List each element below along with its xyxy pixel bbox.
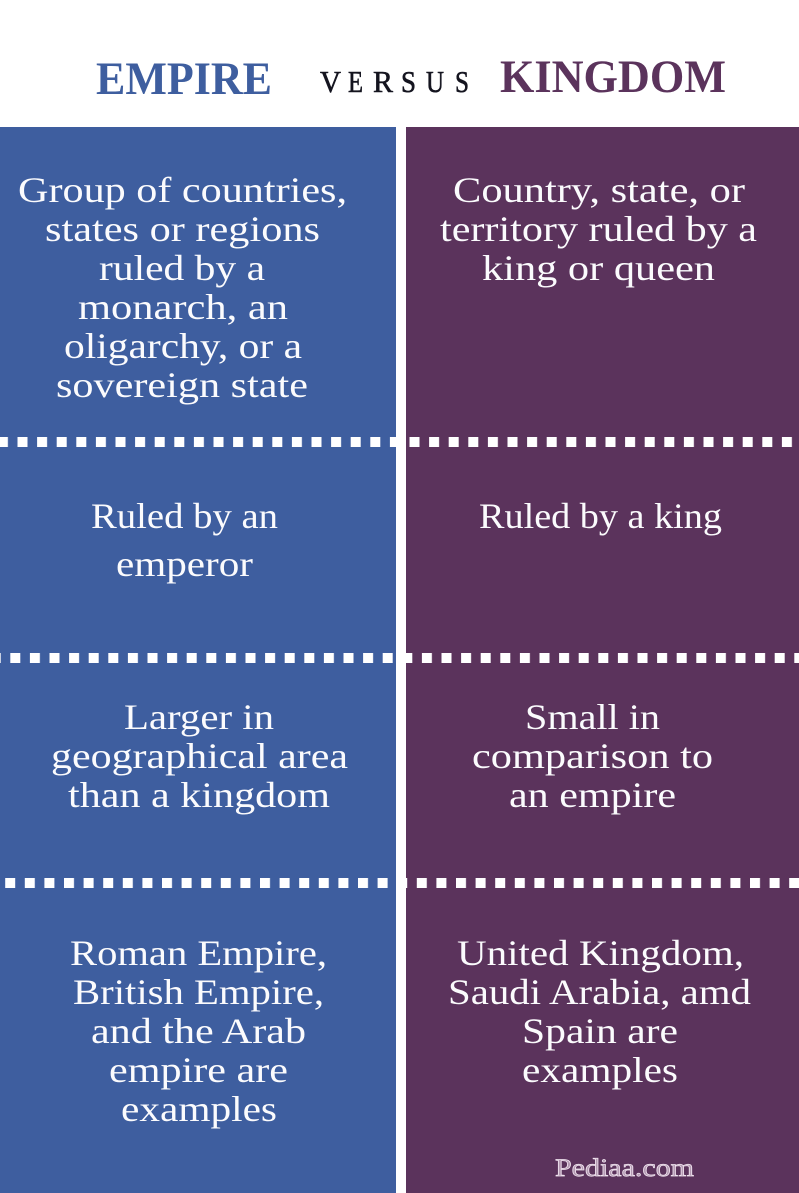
text: kingdom examples: United Kingdom, (457, 933, 744, 973)
title: Empire versus Kingdom (96, 51, 726, 105)
heading: versus: S (401, 64, 416, 99)
text: kingdom definition: king or queen (482, 248, 715, 288)
divider row 1 (0, 437, 799, 447)
logo: Pediaa.com: Pediaa.com (555, 1155, 695, 1182)
heading: versus: U (426, 64, 444, 99)
heading: Empire: EMPIRE (96, 53, 272, 105)
text: empire ruler: Ruled by an (91, 496, 278, 536)
text: kingdom definition: territory ruled by a (440, 209, 757, 249)
text: kingdom size: an empire (509, 775, 676, 815)
text: kingdom examples: examples (522, 1050, 678, 1090)
text: empire definition: monarch, an (78, 287, 288, 327)
text: empire size (51, 697, 348, 815)
text: kingdom examples (448, 933, 751, 1090)
text: empire definition: oligarchy, or a (64, 326, 302, 366)
heading: versus: V (320, 64, 342, 99)
text: empire definition: Group of countries, (18, 170, 347, 210)
text: empire examples: empire are (109, 1050, 288, 1090)
text: empire definition: states or regions (45, 209, 320, 249)
divider row 3 (5, 878, 799, 888)
heading: versus (320, 64, 469, 99)
heading: versus: R (373, 64, 393, 99)
text: kingdom definition: Country, state, or (453, 170, 745, 210)
text: empire definition: sovereign state (56, 365, 308, 405)
text: kingdom ruler: Ruled by a king (479, 496, 722, 536)
text: empire size: geographical area (51, 736, 348, 776)
text: empire examples: Roman Empire, (70, 933, 327, 973)
text: empire ruler (91, 496, 278, 584)
text: empire size: Larger in (124, 697, 274, 737)
text: empire examples: and the Arab (91, 1011, 306, 1051)
text: kingdom examples: Spain are (522, 1011, 678, 1051)
text: kingdom size (472, 697, 713, 815)
panel: kingdom column (406, 127, 799, 1193)
text: kingdom definition (440, 170, 757, 288)
text: empire size: than a kingdom (68, 775, 330, 815)
heading: versus: S (455, 64, 469, 99)
text: empire definition: ruled by a (99, 248, 265, 288)
text: empire definition (18, 170, 347, 405)
text: kingdom size: Small in (525, 697, 660, 737)
divider row 2 (0, 653, 799, 663)
text: empire examples: British Empire, (73, 972, 324, 1012)
text: empire examples (70, 933, 327, 1129)
panel: empire column (0, 127, 396, 1193)
heading: Kingdom: KINGDOM (500, 51, 726, 103)
text: empire examples: examples (121, 1089, 277, 1129)
heading: versus: E (348, 64, 363, 99)
text: kingdom examples: Saudi Arabia, amd (448, 972, 751, 1012)
text: kingdom size: comparison to (472, 736, 713, 776)
text: empire ruler: emperor (116, 544, 253, 584)
